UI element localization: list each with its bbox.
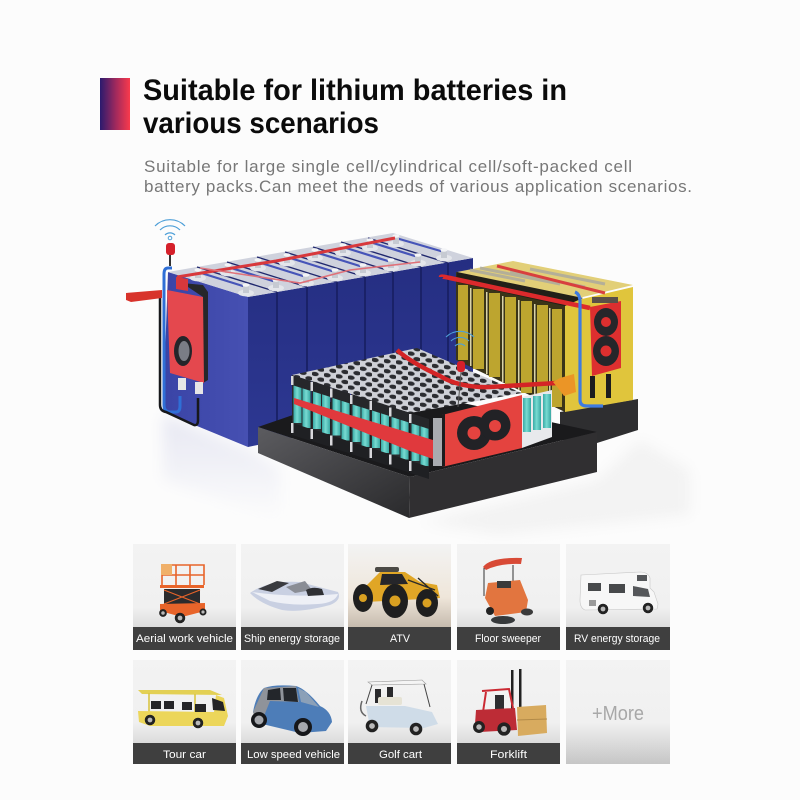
icon: RV <box>580 572 658 614</box>
title <box>143 74 567 140</box>
card: Ship energy storage <box>241 544 344 650</box>
wifi antenna, front pack <box>446 331 474 407</box>
icon: golf cart <box>361 680 438 735</box>
label: Aerial work vehicle <box>136 633 233 645</box>
card: Low speed vehicle <box>241 660 344 764</box>
label bar <box>457 743 560 764</box>
cylindrical cell pack <box>291 348 552 479</box>
label bar <box>566 627 670 650</box>
label bar <box>133 627 236 650</box>
card: Aerial work vehicle <box>133 544 236 650</box>
subtitle: Suitable for large single cell/cylindrical cell/soft-packed cell <box>144 157 632 176</box>
yellow battery platform <box>560 399 638 443</box>
label bar <box>457 627 560 650</box>
card: Floor sweeper <box>457 544 560 650</box>
red power connector <box>126 290 162 302</box>
icon: forklift <box>473 669 547 736</box>
label: RV energy storage <box>574 633 660 645</box>
label: Tour car <box>163 749 206 761</box>
label: ATV <box>390 633 411 645</box>
label: +More <box>592 703 644 725</box>
label bar <box>348 627 451 650</box>
subtitle <box>144 157 692 196</box>
icon: ATV buggy <box>353 567 440 618</box>
label: Golf cart <box>379 749 422 761</box>
icon: small blue car <box>251 685 332 736</box>
label: Low speed vehicle <box>247 749 340 761</box>
red cable and yellow connector <box>397 350 576 396</box>
title: various scenarios <box>143 107 379 140</box>
card: more <box>566 660 670 764</box>
card: Golf cart <box>348 660 451 764</box>
label bar <box>241 743 344 764</box>
yellow prismatic battery pack <box>441 261 633 412</box>
label bar <box>241 627 344 650</box>
title accent bar <box>100 78 130 130</box>
BMS board on blue pack <box>167 277 208 394</box>
side wiring <box>160 268 198 425</box>
floor reflection <box>163 415 690 535</box>
card: ATV <box>348 544 451 650</box>
title: Suitable for lithium batteries in <box>143 74 567 107</box>
card: RV energy storage <box>566 544 670 650</box>
label bar <box>348 743 451 764</box>
label: Ship energy storage <box>244 633 340 645</box>
icon: scissor lift <box>159 564 206 623</box>
front platform <box>258 385 597 518</box>
card: Forklift <box>457 660 560 764</box>
label: Forklift <box>490 749 527 761</box>
icon: floor sweeper <box>483 558 533 624</box>
icon: tour car <box>138 690 228 728</box>
subtitle: battery packs.Can meet the needs of various application scenarios. <box>144 177 692 196</box>
label: Floor sweeper <box>475 633 541 645</box>
front BMS board <box>442 395 522 467</box>
wifi antenna, blue pack <box>155 220 185 266</box>
blue prismatic battery pack <box>163 233 473 447</box>
icon: boat <box>250 581 339 611</box>
battery illustration <box>126 220 690 535</box>
card: Tour car <box>133 660 236 764</box>
label bar <box>133 743 236 764</box>
